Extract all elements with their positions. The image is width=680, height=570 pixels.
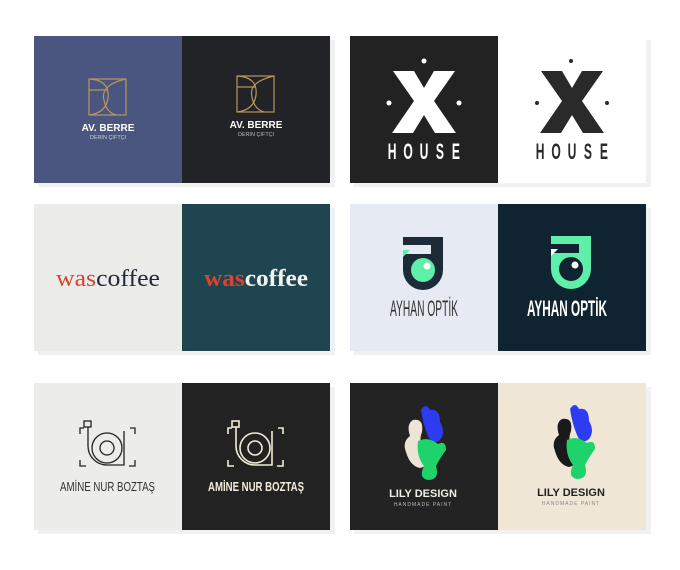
icon: AV Berre logo left — [89, 79, 126, 115]
logo: X House right: HOUSE — [536, 139, 608, 164]
panel: AV Berre: DERIN ÇIFTÇI — [238, 132, 275, 138]
icon: Lily blobs left — [405, 406, 446, 480]
panel: Lily Design: HANDMADE PAINT — [542, 501, 600, 507]
text: Lily right: LILY DESIGN — [537, 487, 605, 499]
text: Amine right: AMİNE NUR BOZTAŞ — [208, 479, 304, 494]
panel: wascoffee — [34, 204, 335, 355]
icon: Lily blobs right — [554, 405, 595, 479]
logo: X House left: HOUSE — [388, 139, 460, 164]
icon: camera left — [80, 421, 135, 466]
panel: Ayhan Optik — [350, 204, 651, 355]
panel: AV Berre: DERIN ÇIFTÇI — [90, 135, 127, 141]
panel: AV Berre — [34, 36, 335, 187]
panel: X House — [350, 36, 651, 187]
logo: X House left — [386, 58, 462, 164]
panel: Amine Nur Boztaş — [34, 383, 335, 534]
text: wascoffee left: wascoffee — [56, 266, 160, 292]
icon: Ayhan left — [403, 237, 443, 290]
text: AV Berre left: AV. BERRE — [82, 123, 135, 134]
text: wascoffee right: wascoffee — [204, 266, 308, 292]
icon: AV Berre logo right — [237, 76, 274, 112]
logo: X House right — [535, 59, 609, 164]
panel: Ayhan Optik: AYHAN OPTİK — [390, 296, 458, 321]
icon: Ayhan right — [551, 236, 591, 289]
text: Lily left: LILY DESIGN — [389, 488, 457, 500]
text: AV Berre right: AV. BERRE — [230, 120, 283, 131]
text: Ayhan right: AYHAN OPTİK — [527, 296, 607, 321]
panel: Lily Design — [350, 383, 651, 534]
text: Amine left: AMİNE NUR BOZTAŞ — [60, 479, 155, 494]
panel: Lily Design: HANDMADE PAINT — [394, 502, 452, 508]
icon: camera right — [228, 421, 283, 466]
